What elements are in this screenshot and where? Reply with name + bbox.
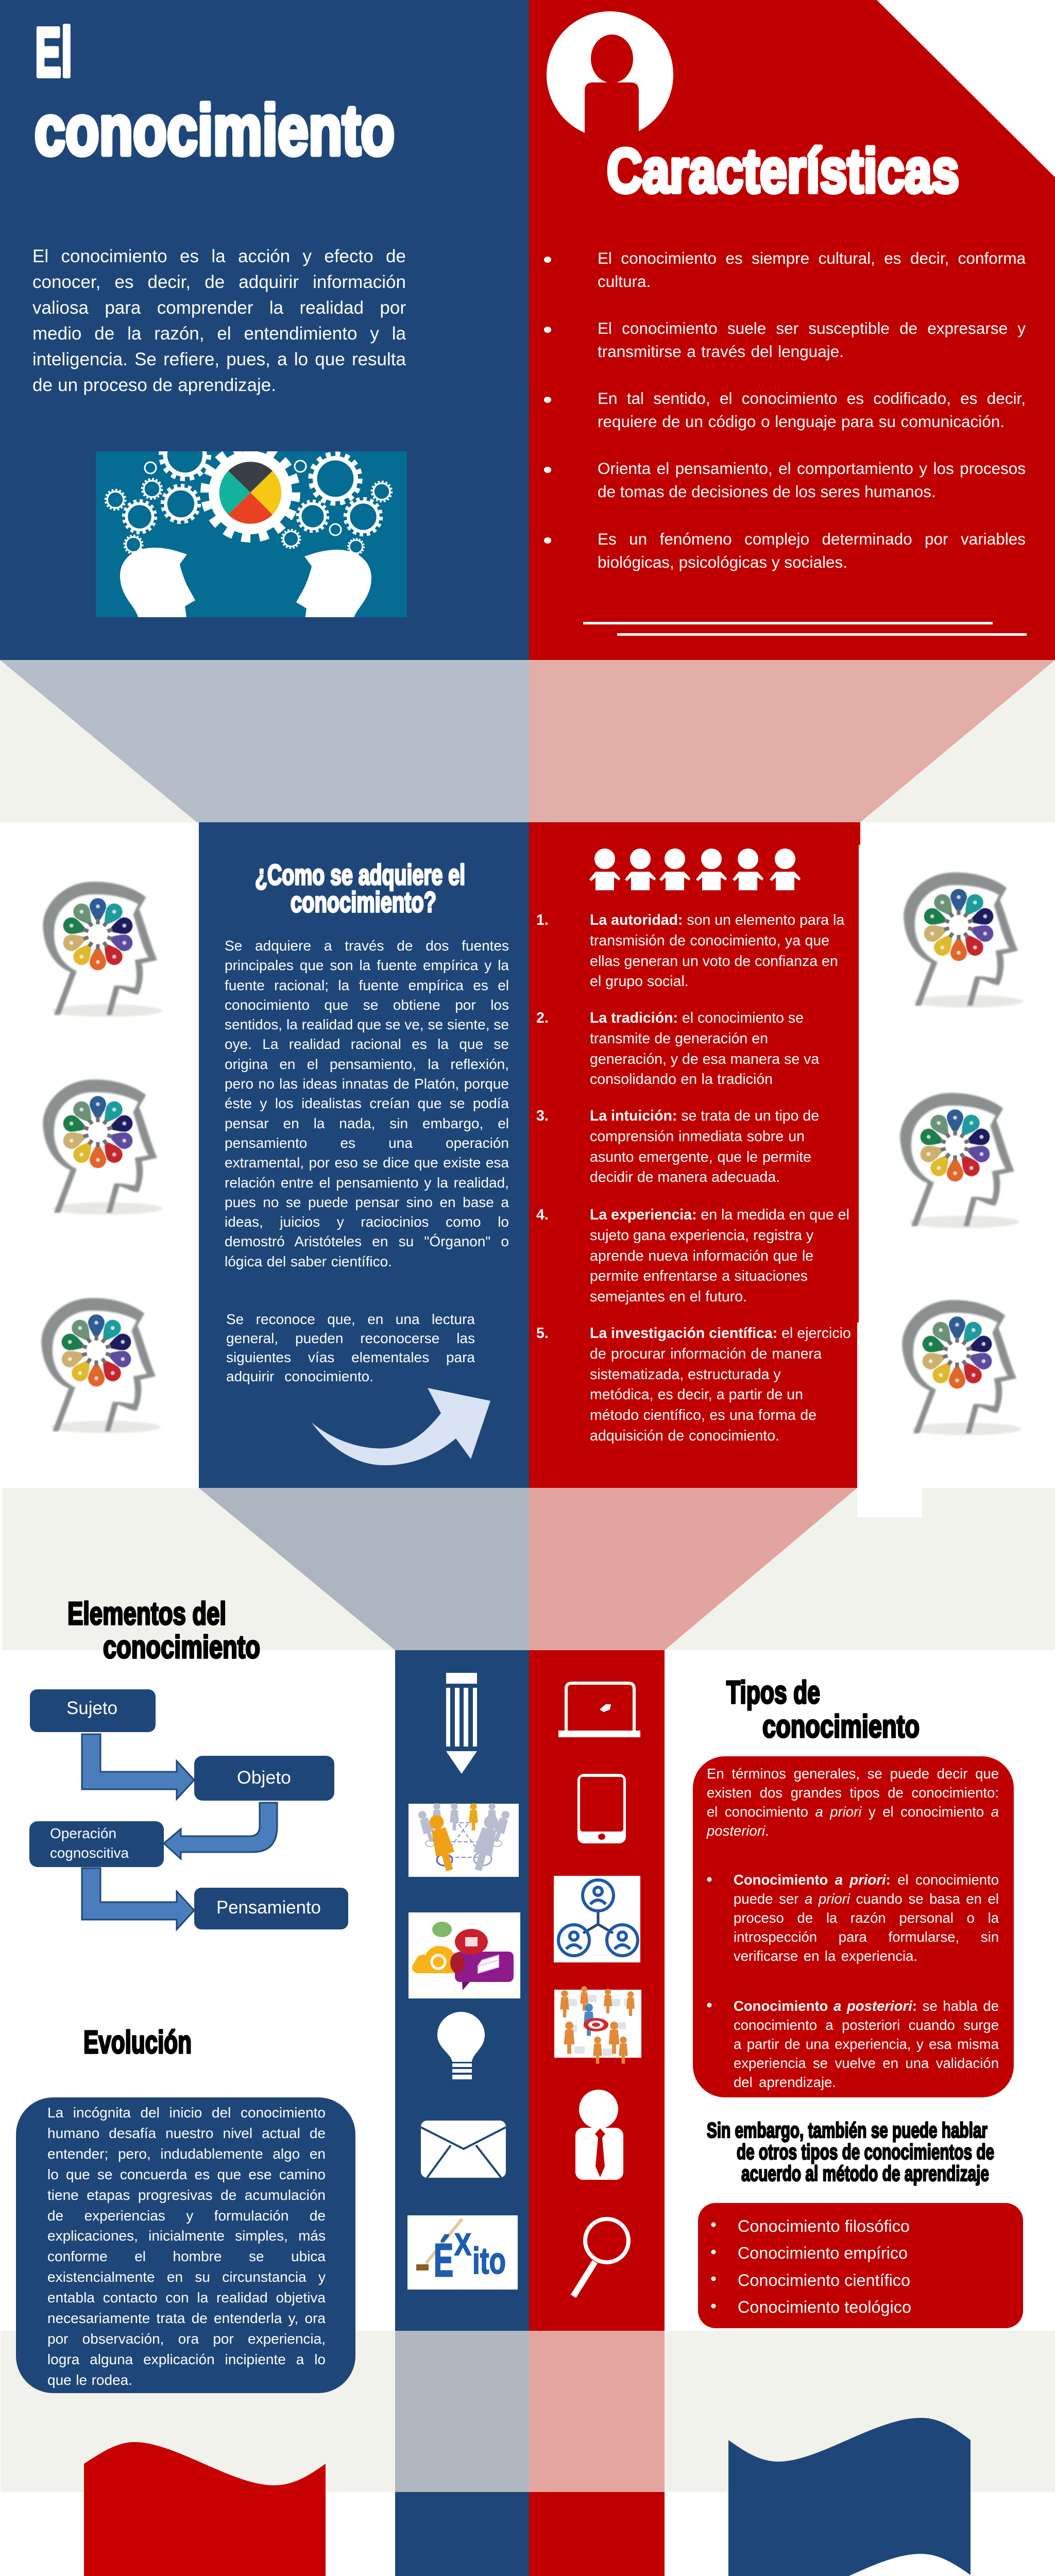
characteristic 4: Orienta el pensamiento, el comportamiento y los procesos (598, 459, 1026, 478)
heading: Tipos de conocimiento: Tipos de (726, 1675, 820, 1710)
text: evolution paragraph: que le rodea. (47, 2372, 132, 2388)
item 4 experiencia: aprende nueva información que le (590, 1248, 813, 1264)
heading: El conocimiento (35, 13, 395, 170)
heading: como se adquiere (255, 858, 465, 918)
text: reconoce paragraph (226, 1310, 475, 1386)
text: reconoce paragraph: Se reconoce que, en una lectura (226, 1311, 475, 1327)
text: a priori: verificarse en la experiencia. (734, 1948, 917, 1964)
icon: magnifying glass (573, 2219, 628, 2296)
text: intro paragraph (32, 246, 406, 395)
text: how knowledge is acquired: lógica del saber científico. (225, 1253, 392, 1269)
characteristic 5: Es un fenómeno complejo determinado por variables (598, 530, 1026, 548)
text: evolution paragraph: logra alguna explicación incipiente a lo (47, 2351, 326, 2367)
heading: El conocimiento: El (35, 13, 72, 91)
text: how knowledge is acquired: éste y los idealistas creían que se podía (225, 1095, 509, 1111)
heading: Evolución: Evolución (83, 2025, 192, 2060)
flow arrow: sujeto to objeto (82, 1734, 194, 1799)
flow box: Pensamiento (194, 1888, 348, 1929)
item 5 investigacion: 5. (536, 1325, 549, 1342)
text: how knowledge is acquired: origina en el pensamiento, la reflexión, (225, 1056, 509, 1072)
characteristic 1 (598, 249, 1026, 291)
text: a priori: puede ser a priori cuando se basa en el (734, 1891, 999, 1907)
heading: Elementos del conocimiento: Elementos del (67, 1596, 226, 1632)
image: network of people (409, 1803, 519, 1877)
text: types of knowledge intro: posteriori. (707, 1823, 769, 1839)
item 2 tradicion: 2. (536, 1010, 549, 1026)
text: types of knowledge intro: el conocimiento a priori y el conocimiento a (707, 1804, 999, 1820)
image: head with bulbs left 2 (43, 1079, 162, 1215)
flow box: Objeto (194, 1756, 334, 1801)
item 3 intuicion (536, 1106, 845, 1188)
text: evolution paragraph: explicaciones, inicialmente simples, más (47, 2228, 326, 2244)
text: a posteriori: conocimiento a posteriori cuando surge (734, 2017, 999, 2033)
heading: Elementos del conocimiento (67, 1596, 260, 1665)
icon: six paper people (589, 849, 801, 890)
characteristic 2 (598, 319, 1026, 361)
icon: light bulb (437, 2012, 485, 2079)
item 4 experiencia: 4. (536, 1207, 549, 1223)
characteristic 3: requiere de un código o lenguaje para su comunicación. (598, 412, 1005, 431)
image: thinking heads with gears (96, 451, 407, 617)
item 2 tradicion: La tradición: el conocimiento se (590, 1010, 804, 1026)
panel: blue intro background (0, 0, 529, 660)
text: evolution paragraph: tiene etapas progresivas de acumulación (47, 2187, 326, 2203)
text: how knowledge is acquired: pues no se puede pensar sino en base a (225, 1194, 509, 1210)
text: evolution paragraph: humano desafía nuestro nivel actual de (47, 2125, 326, 2141)
heading: Tipos de conocimiento (726, 1675, 920, 1744)
image: head with bulbs right 1 (904, 872, 1023, 1008)
item 3 intuicion: comprensión inmediata sobre un (590, 1128, 805, 1145)
item 4 experiencia: La experiencia: en la medida en que el (590, 1207, 849, 1223)
text: evolution paragraph: La incógnita del inicio del conocimiento (47, 2105, 326, 2121)
flow arrow: operacion to pensamiento (82, 1868, 194, 1929)
panel: red learning method list: Conocimiento filosófico (738, 2217, 910, 2235)
text: how knowledge is acquired: demostró Aristóteles en su "Órganon" o (225, 1233, 509, 1249)
text: how knowledge is acquired: conocimiento que se obtiene por los (225, 997, 509, 1013)
panel: red learning method list: Conocimiento teológico (738, 2298, 911, 2316)
item 3 intuicion: 3. (536, 1108, 549, 1124)
text: a posteriori: del aprendizaje. (734, 2074, 836, 2090)
item 4 experiencia (536, 1205, 845, 1308)
flow box: Sujeto: Sujeto (66, 1698, 117, 1718)
item 1 autoridad: transmisión de conocimiento, ya que (590, 933, 829, 949)
panel: red learning method list: Conocimiento empírico (738, 2244, 908, 2262)
text: a priori (734, 1870, 999, 1965)
heading: como se adquiere: conocimiento? (291, 886, 436, 918)
text: evolution paragraph: conforme el hombre se ubica (47, 2248, 326, 2264)
item 5 investigacion (536, 1324, 845, 1447)
bullets: characteristics list (544, 257, 551, 544)
flow box: Pensamiento: Pensamiento (216, 1897, 321, 1918)
panel: central red strip (529, 1650, 665, 2331)
flow chart: elements of knowledge (29, 1689, 348, 1929)
icon: tablet (577, 1774, 626, 1843)
text: how knowledge is acquired: extramental, por eso se dice que existe esa (225, 1155, 509, 1171)
item 3 intuicion: decidir de manera adecuada. (590, 1169, 780, 1185)
text: reconoce paragraph: adquirir conocimiento. (226, 1368, 373, 1384)
item 2 tradicion: generación, y de esa manera se va (590, 1051, 819, 1067)
item 1 autoridad: el grupo social. (590, 973, 689, 990)
text: how knowledge is acquired: pensamiento es una operación (225, 1135, 509, 1151)
item 5 investigacion: de procurar información de manera (590, 1346, 822, 1362)
heading: Tipos de conocimiento: conocimiento (762, 1709, 920, 1744)
image: Éxito crane: ito (472, 2241, 506, 2282)
item 3 intuicion: La intuición: se trata de un tipo de (590, 1108, 819, 1124)
text: ways to acquire numbered list (536, 910, 845, 1451)
panel: lower red strip (529, 2492, 665, 2576)
panel: blue how knowledge is acquired background (199, 822, 529, 1488)
panel: red learning method list (698, 2203, 1023, 2328)
band: third transition (1, 2331, 1055, 2492)
image: Éxito crane: É (434, 2234, 453, 2286)
text: intro paragraph: inteligencia. Se refiere, pues, a lo que resulta (32, 349, 406, 369)
characteristic 4: de tomas de decisiones de los seres humanos. (598, 482, 936, 501)
item 1 autoridad: 1. (536, 912, 549, 928)
text: how knowledge is acquired: fuente racional; la fuente empírica es el (225, 977, 509, 993)
text: intro paragraph: valiosa para comprender la realidad por (32, 298, 406, 318)
panel: red learning method list: Conocimiento científico (738, 2271, 910, 2290)
panel: central blue strip (395, 1650, 529, 2331)
flow box: Objeto: Objeto (237, 1768, 291, 1788)
flow box: Sujeto (30, 1689, 156, 1732)
text: how knowledge is acquired: Se adquiere a través de dos fuentes (225, 938, 509, 954)
image: three connected users (554, 1876, 640, 1962)
text: evolution paragraph: de experiencias y formulación de (47, 2208, 326, 2224)
item 4 experiencia: sujeto gana experiencia, registra y (590, 1227, 813, 1244)
characteristic 3: En tal sentido, el conocimiento es codificado, es decir, (598, 389, 1026, 408)
text: evolution paragraph: lo que se concuerda es que ese camino (47, 2166, 326, 2182)
characteristic 5: biológicas, psicológicas y sociales. (598, 553, 847, 571)
text: a posteriori (734, 1996, 999, 2092)
heading: Sin embargo (707, 2118, 994, 2185)
item 5 investigacion: método científico, es una forma de (590, 1407, 816, 1423)
text: types of knowledge intro: En términos generales, se puede decir que (707, 1766, 999, 1782)
image: crowd around target (554, 1986, 641, 2064)
icon: red flag (84, 2442, 326, 2576)
text: evolution paragraph: entabla contacto con la realidad objetiva (47, 2290, 326, 2306)
heading: Características: Características (607, 135, 959, 206)
text: a posteriori: experiencia se vuelve en una validación (734, 2055, 999, 2071)
text: a posteriori: a partir de una experiencia, y esa misma (734, 2036, 999, 2052)
image: Éxito crane: X (454, 2227, 471, 2262)
characteristic 1: cultura. (598, 272, 651, 291)
icon: person in circle (547, 11, 673, 155)
text: characteristics list (598, 249, 1026, 571)
item 2 tradicion (536, 1008, 845, 1090)
characteristic 5 (598, 528, 1026, 574)
panel: red characteristics background (529, 0, 1055, 660)
flow arrow: objeto to operacion (164, 1803, 277, 1859)
text: how knowledge is acquired: pensar en la nada, sin embargo, el (225, 1115, 509, 1131)
item 1 autoridad (536, 910, 845, 992)
text: a priori: Conocimiento a priori: el conocimiento (734, 1872, 999, 1888)
panel: lower blue strip (395, 2492, 529, 2576)
text: intro paragraph: conocer, es decir, de adquirir información (32, 272, 406, 292)
icon: envelope (421, 2121, 506, 2178)
heading: El conocimiento: conocimiento (35, 91, 395, 170)
panel: red types of knowledge box (693, 1756, 1014, 2097)
text: a priori: introspección para formularse, sin (734, 1929, 999, 1945)
text: reconoce paragraph: general, pueden reconocerse las (226, 1330, 475, 1346)
heading: como se adquiere: ¿Como se adquiere el (255, 858, 465, 891)
text: types of knowledge intro: existen dos grandes tipos de conocimiento: (707, 1785, 999, 1801)
image: head with bulbs left 1 (43, 882, 162, 1017)
text: intro paragraph: de un proceso de aprendizaje. (32, 375, 276, 395)
image: head with bulbs right 3 (902, 1300, 1022, 1435)
item 5 investigacion: La investigación científica: el ejercicio (590, 1325, 851, 1342)
characteristic 2: El conocimiento suele ser susceptible de expresarse y (598, 319, 1026, 337)
text: a priori: proceso de la razón personal o la (734, 1910, 999, 1926)
item 3 intuicion: asunto emergente, que le permite (590, 1149, 811, 1165)
text: evolution paragraph (47, 2103, 326, 2391)
item 4 experiencia: semejantes en el futuro. (590, 1289, 747, 1305)
image: speech bubbles with books (409, 1912, 520, 1998)
flow box: Operación cognoscitiva: cognoscitiva (50, 1845, 129, 1861)
item 1 autoridad: ellas generan un voto de confianza en (590, 953, 838, 970)
characteristic 1: El conocimiento es siempre cultural, es decir, conforma (598, 249, 1026, 267)
text: how knowledge is acquired: principales que son la fuente empírica y la (225, 957, 509, 973)
characteristic 4 (598, 457, 1026, 503)
item 1 autoridad: La autoridad: son un elemento para la (590, 912, 844, 928)
image: head with bulbs right 2 (900, 1093, 1019, 1228)
text: evolution paragraph: existencialmente en su circunstancia y (47, 2269, 326, 2285)
item 2 tradicion: consolidando en la tradición (590, 1071, 773, 1088)
text: reconoce paragraph: siguientes vías elementales para (226, 1349, 475, 1365)
characteristic 2: transmitirse a través del lenguaje. (598, 342, 844, 361)
text: how knowledge is acquired: pero no las ideas innatas de Platón, porque (225, 1076, 509, 1092)
panel: red acquisition routes background (529, 822, 860, 1488)
item 5 investigacion: metódica, es decir, a partir de un (590, 1386, 803, 1403)
heading: Elementos del conocimiento: conocimiento (103, 1630, 260, 1665)
flow box: Operación cognoscitiva: Operación (50, 1825, 116, 1841)
text: how knowledge is acquired: oye. La realidad racional es la que se (225, 1036, 509, 1052)
item 4 experiencia: permite enfrentarse a situaciones (590, 1268, 808, 1284)
icon: pencil (446, 1673, 477, 1774)
text: evolution paragraph: necesariamente trata de entenderla y, ora (47, 2310, 326, 2326)
icon: laptop (558, 1683, 640, 1737)
text: a posteriori: Conocimiento a posteriori: se habla de (734, 1998, 999, 2014)
band: second funnel transition (2, 1488, 1055, 1650)
image: head with bulbs left 3 (41, 1298, 161, 1433)
text: evolution paragraph: por observación, ora por experiencia, (47, 2331, 326, 2347)
characteristic 3 (598, 389, 1026, 431)
band: first funnel transition (0, 660, 1055, 822)
item 5 investigacion: sistematizada, estructurada y (590, 1366, 781, 1383)
icon: blue flag (727, 2418, 971, 2576)
panel: blue evolution box (16, 2097, 355, 2393)
text: how knowledge is acquired: sentidos, la realidad que se ve, se siente, se (225, 1016, 509, 1032)
item 2 tradicion: transmite de generación en (590, 1030, 768, 1047)
flow box: Operación cognoscitiva (29, 1821, 164, 1867)
arrow: curved pale arrow (312, 1388, 490, 1465)
image: Éxito crane (407, 2215, 518, 2290)
bullets: types (707, 1877, 712, 2007)
text: intro paragraph: medio de la razón, el entendimiento y la (32, 324, 406, 344)
text: how knowledge is acquired (225, 936, 509, 1272)
text: how knowledge is acquired: relación entre el pensamiento y la realidad, (225, 1175, 509, 1191)
text: how knowledge is acquired: ideas, juicios y raciocinios como lo (225, 1214, 509, 1230)
icon: person with tie (575, 2090, 623, 2180)
item 5 investigacion: adquisición de conocimiento. (590, 1428, 779, 1444)
text: types of knowledge intro (707, 1764, 999, 1840)
text: intro paragraph: El conocimiento es la acción y efecto de (32, 246, 406, 266)
text: evolution paragraph: entender; pero, indudablemente algo en (47, 2146, 326, 2162)
